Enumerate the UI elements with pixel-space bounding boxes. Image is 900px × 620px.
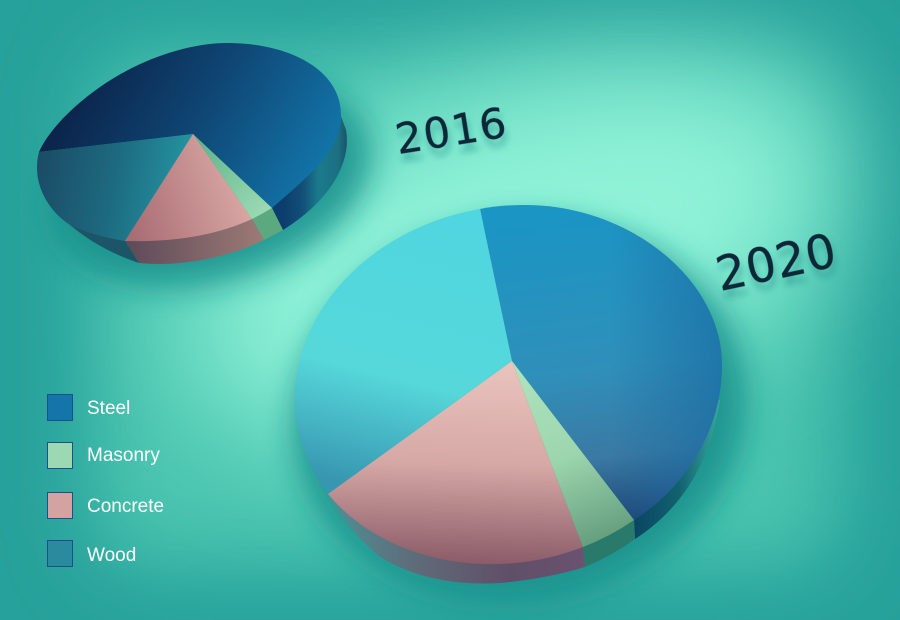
legend item: Steel xyxy=(48,394,130,420)
side: steel xyxy=(272,108,347,230)
side: masonry xyxy=(583,520,635,567)
slice: masonry xyxy=(512,361,634,547)
side: wood xyxy=(70,225,139,263)
slice: steel edge shading xyxy=(480,205,722,520)
slice: steel xyxy=(39,43,341,208)
legend item: Wood xyxy=(48,540,136,566)
shadow: 2016 pie xyxy=(25,43,395,321)
label: 2020: 2020 xyxy=(711,224,841,303)
slice: concrete xyxy=(328,361,583,564)
slice: concrete xyxy=(125,134,252,241)
legend item: Steel: Steel xyxy=(87,398,130,419)
legend item: Masonry: Masonry xyxy=(87,445,160,466)
legend item: Concrete xyxy=(48,492,164,518)
legend item: Concrete: Concrete xyxy=(87,496,164,517)
legend item: Masonry xyxy=(48,442,160,468)
side: concrete xyxy=(328,494,585,583)
slice: wood xyxy=(37,134,193,241)
side: concrete xyxy=(125,219,264,264)
pie chart: 2016 xyxy=(37,43,347,264)
slice: wood xyxy=(295,209,512,494)
slice: masonry xyxy=(193,134,272,219)
side: steel xyxy=(634,400,720,539)
legend item: Wood: Wood xyxy=(87,545,136,566)
shadow: 2020 pie xyxy=(260,182,780,620)
legend xyxy=(48,394,164,566)
side: masonry xyxy=(252,208,283,240)
pie chart: 2020 xyxy=(295,205,722,583)
label: 2016: 2016 xyxy=(392,98,511,164)
slice: steel xyxy=(480,205,722,520)
